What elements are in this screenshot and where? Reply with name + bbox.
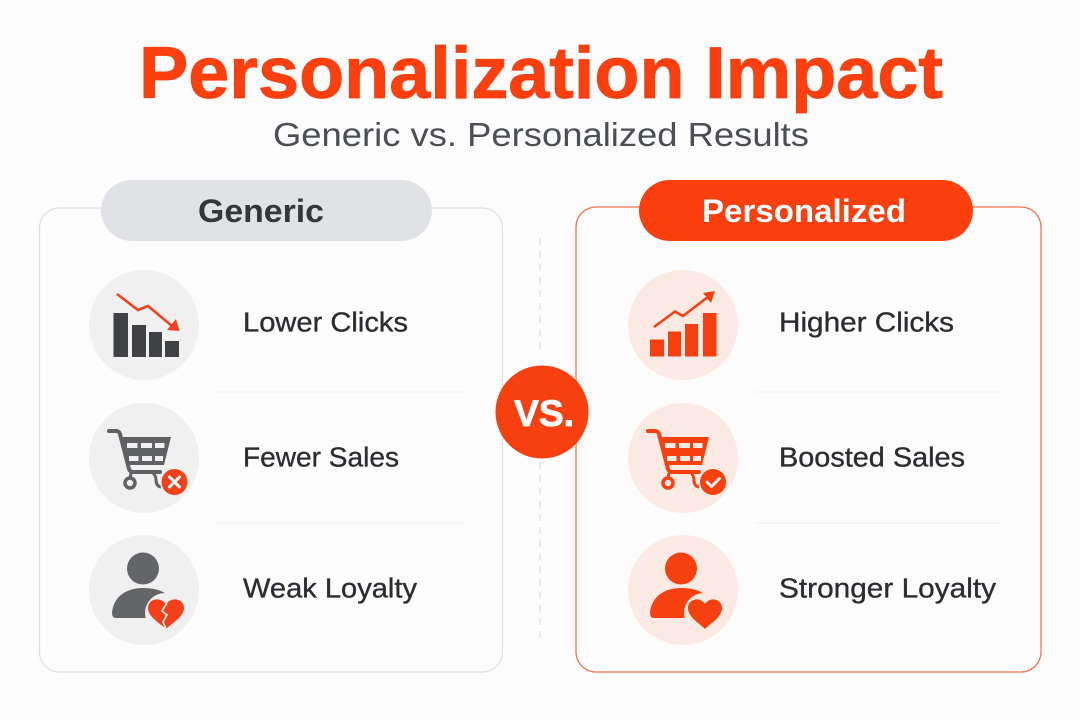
panel: personalized [576,180,1041,672]
subtitle: Generic vs. Personalized Results [273,116,809,153]
text: higher clicks: Higher Clicks [779,306,954,338]
vs badge [496,366,588,458]
text: fewer sales: Fewer Sales [243,442,399,472]
generic header pill [101,180,432,241]
centre dashed divider [539,238,541,642]
generic header pill: Generic [198,193,324,229]
panel: generic [40,180,502,672]
icon: cart with x [89,403,199,513]
icon: user with heart [628,535,738,645]
icon: cart with check [628,403,738,513]
personalized header pill: Personalized [702,193,906,229]
text: stronger loyalty: Stronger Loyalty [779,572,996,604]
icon: rising bar chart [628,270,738,380]
text: lower clicks: Lower Clicks [243,306,408,338]
personalized header pill [639,180,973,241]
title: Personalization Impact [139,33,943,114]
row dividers [755,392,1001,523]
text: boosted sales: Boosted Sales [779,442,965,472]
vs badge: VS. [514,393,574,434]
text: weak loyalty: Weak Loyalty [243,572,417,604]
icon: falling bar chart [89,270,199,380]
icon: user with broken heart [89,535,199,645]
row dividers [217,392,464,523]
